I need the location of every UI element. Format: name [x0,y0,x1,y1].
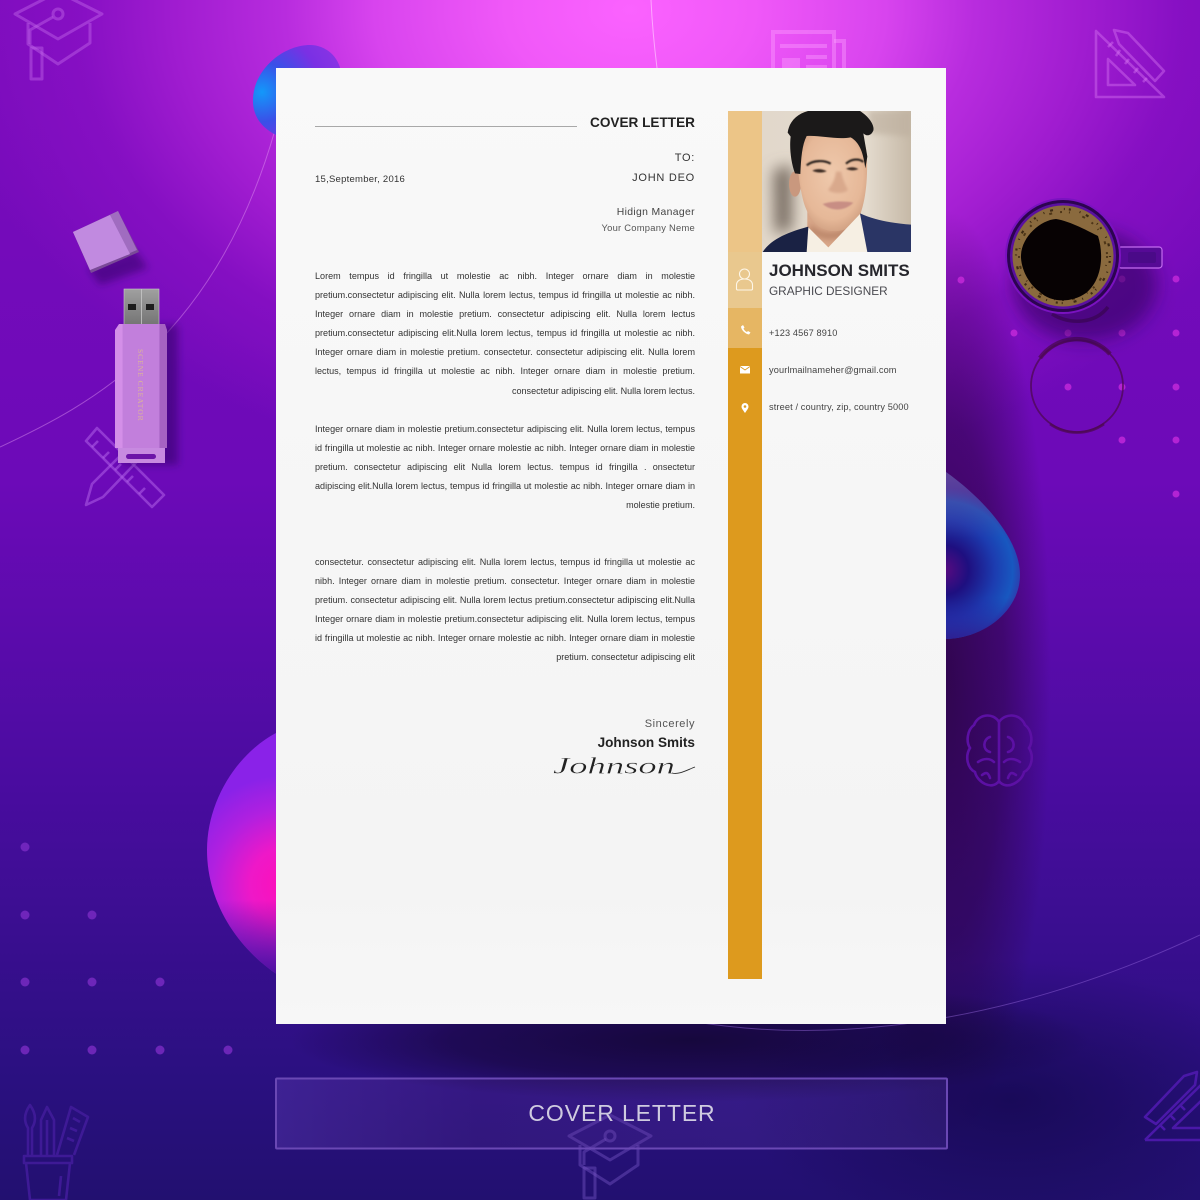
body paragraph 1: pretium.consectetur adipiscing elit.Nulla lorem lectus, tempus id fringilla ut molestie ac nibh. [315,328,695,338]
icon: newspaper top [773,32,844,70]
phone number: +123 4567 8910 [769,328,838,338]
icon: pencil and set square bottom right [1145,1072,1200,1140]
hair [788,110,874,174]
icon: map pin [742,403,748,413]
signer name: Johnson Smits [598,735,695,750]
date: 15,September, 2016 [315,174,405,185]
blob: top left [253,45,341,135]
email address: yourlmailnameher@gmail.com [769,365,897,375]
body paragraph 3 [315,557,696,662]
heading rule [315,126,577,127]
signature [553,754,696,778]
banner label: COVER LETTER [528,1100,716,1126]
body paragraph 3: pretium. consectetur adipiscing elit. Nulla lorem lectus pretium.consectetur adipiscing elit.Nulla [315,595,695,605]
body paragraph 3: nibh. Integer ornare diam in molestie pretium. consectetur. Integer ornare diam in molestie [315,576,695,586]
body paragraph 2: adipiscing elit.Nulla lorem lectus, tempus id fringilla ut molestie ac nibh. Integer ornare diam in [315,481,695,491]
body paragraph 3: pretium. consectetur adipiscing elit [556,652,695,662]
body paragraph 1 [315,271,695,396]
sidebar colour bar with icons [728,111,762,979]
body paragraph 1: pretium.consectetur adipiscing elit. Nulla lorem lectus, tempus id fringilla ut molestie ac nibh. [315,290,695,300]
icon: brain [967,716,1032,785]
icon: pencil pot [24,1105,88,1200]
portrait photo [762,111,911,252]
coffee stain ring [1031,307,1123,433]
icon: person [736,269,752,290]
cap of usb drive [73,211,148,285]
body paragraph 3: Integer ornare diam in molestie pretium.consectetur adipiscing elit. Nulla lorem lectus, tempus [315,614,695,624]
icon: graduation cap bottom center [569,1115,651,1198]
body paragraph 1: Integer ornare diam in molestie pretium. consectetur adipiscing elit. Nulla lorem lectus [315,309,695,319]
nose and mouth [828,172,848,193]
recipient label: TO: [675,152,695,164]
neck and skin [807,212,861,248]
recipient role: Hidign Manager [617,207,695,218]
signature: Johnson [553,754,675,778]
body paragraph 2: molestie pretium. [626,500,695,510]
dots: right grid [958,276,1180,498]
usb brand text: SCENE CREATOR [136,349,145,422]
body paragraph 3: id fringilla ut molestie ac nibh. Integer ornare molestie ac nibh. Integer ornare diam in molestie [315,633,695,643]
decorative curve: top [651,0,657,68]
decorative curve: upper left [0,130,275,447]
icon: phone [741,325,750,334]
icon: graduation cap top left [15,0,102,79]
body paragraph 1: lectus, tempus id fringilla ut molestie ac nibh. Integer ornare diam in molestie pretium. [315,366,695,376]
name: JOHNSON SMITS [769,261,910,280]
paper sheet [276,68,946,1024]
closing: Sincerely [645,718,695,730]
job title: GRAPHIC DESIGNER [769,284,888,298]
paper shadow: right and below [290,210,1200,1200]
blob: right [946,472,1020,639]
body paragraph 1: Lorem tempus id fringilla ut molestie ac nibh. Integer ornare diam in molestie [315,271,695,281]
body paragraph 2: id fringilla ut molestie ac nibh. Integer ornare molestie ac nibh. Integer ornare diam in molestie [315,443,695,453]
body paragraph 2: Integer ornare diam in molestie pretium.consectetur adipiscing elit. Nulla lorem lectus, tempus [315,424,695,434]
usb drive [115,289,178,465]
postal address: street / country, zip, country 5000 [769,402,909,412]
body paragraph 1: Integer ornare diam in molestie pretium. consectetur. consectetur adipiscing elit. Nulla lorem [315,347,695,357]
icon: set square top right [1096,30,1164,97]
recipient name: JOHN DEO [632,172,695,184]
dots: bottom left grid [20,842,232,1054]
icon: envelope [740,366,750,374]
body paragraph 2 [315,424,695,510]
coffee mug [1006,199,1162,341]
recipient company: Your Company Neme [601,222,695,233]
jacket [763,227,808,252]
brows and eyes [807,160,863,173]
decorative curve: lower right [690,935,1200,1030]
icon: crossed ruler and pencil [86,428,164,507]
body paragraph 3: consectetur. consectetur adipiscing elit. Nulla lorem lectus, tempus id fringilla ut molestie ac [315,557,695,567]
body paragraph 2: pretium. consectetur adipiscing elit Nulla lorem lectus. tempus id fringilla . onsectetur [315,462,695,472]
heading: cover letter: COVER LETTER [590,115,695,130]
body paragraph 1: consectetur adipiscing elit. Nulla lorem lectus. [512,386,695,396]
shirt [806,214,867,252]
blob: bottom left [207,732,278,975]
banner box [276,1078,947,1148]
